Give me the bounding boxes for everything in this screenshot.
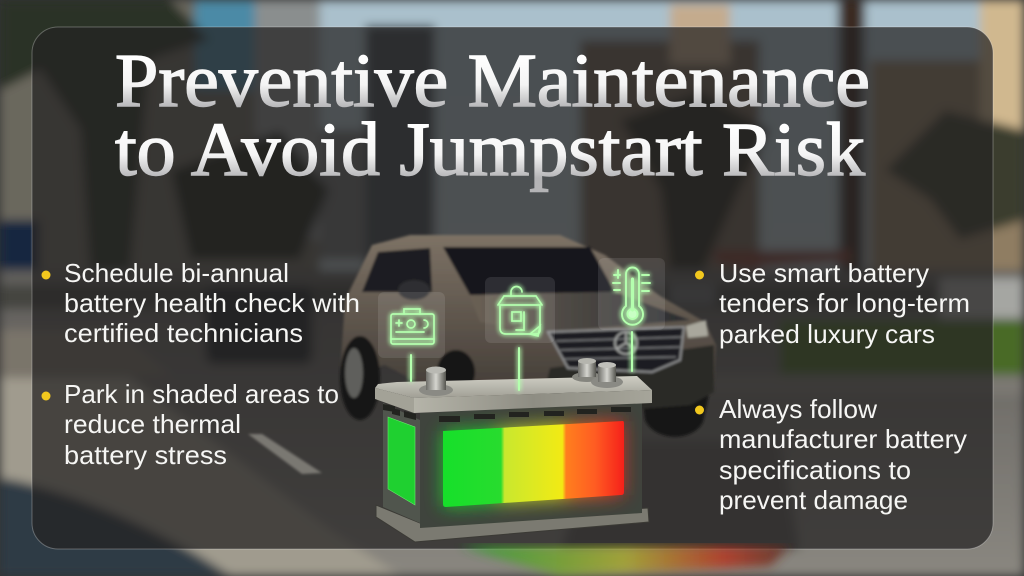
battery terminal: front right <box>591 362 623 388</box>
bullet: shaded parking <box>42 379 339 470</box>
battery <box>375 358 652 542</box>
bullet: smart tenders: parked luxury cars <box>719 319 935 349</box>
battery base <box>376 505 649 542</box>
car badge <box>615 332 637 354</box>
bullet: shaded parking: battery stress <box>64 440 227 470</box>
bullet: manufacturer specs: specifications to <box>719 455 911 485</box>
title: Preventive Maintenance <box>115 39 870 123</box>
bullet: smart tenders: Use smart battery <box>719 258 929 288</box>
battery glow on ground <box>460 546 790 576</box>
battery front <box>420 403 642 528</box>
battery lid side <box>375 388 414 413</box>
car front wheel <box>640 380 712 437</box>
bullet: shaded parking: Park in shaded areas to <box>64 379 339 409</box>
hologram icon: thermometer <box>598 258 665 371</box>
bullet: manufacturer specs: manufacturer battery <box>719 424 967 454</box>
car rear wheel rim <box>345 348 363 398</box>
hologram icon: battery health <box>378 292 445 381</box>
bullet: bi-annual check: certified technicians <box>64 318 303 348</box>
bullet: bi-annual check: Schedule bi-annual <box>64 258 289 288</box>
car hood <box>470 292 690 332</box>
battery lid front <box>414 390 652 413</box>
bullet: manufacturer specs: prevent damage <box>719 485 908 515</box>
car headlight <box>686 320 708 338</box>
front display <box>443 421 624 507</box>
hologram icon: battery tender <box>485 277 555 390</box>
car wheel arch <box>437 350 475 394</box>
battery lid top <box>375 376 652 398</box>
car lower fascia <box>540 345 714 412</box>
bullet: bi-annual check <box>42 258 360 348</box>
battery terminal: left <box>419 366 453 396</box>
car windshield <box>443 247 615 295</box>
bullet: smart tenders <box>695 258 970 349</box>
front glow <box>443 421 623 507</box>
bullet: bi-annual check: battery health check with <box>64 288 360 318</box>
car rear wheel <box>340 336 380 420</box>
bullet: shaded parking: reduce thermal <box>64 409 241 439</box>
bullet: manufacturer specs: Always follow <box>719 394 877 424</box>
bullet: smart tenders: tenders for long-term <box>719 288 970 318</box>
foreground car <box>340 235 716 437</box>
side display <box>388 417 415 505</box>
road marking <box>248 434 322 474</box>
car body <box>340 235 716 412</box>
bullet: manufacturer specs <box>695 394 967 515</box>
car grille bars <box>556 337 682 359</box>
battery side <box>383 403 420 523</box>
vent slots <box>383 404 631 422</box>
car mirror <box>398 280 430 300</box>
car grille <box>548 327 684 372</box>
car side windows <box>362 248 432 292</box>
battery terminal: rear right <box>572 358 602 382</box>
title: to Avoid Jumpstart Risk <box>115 108 865 192</box>
title <box>115 39 870 192</box>
